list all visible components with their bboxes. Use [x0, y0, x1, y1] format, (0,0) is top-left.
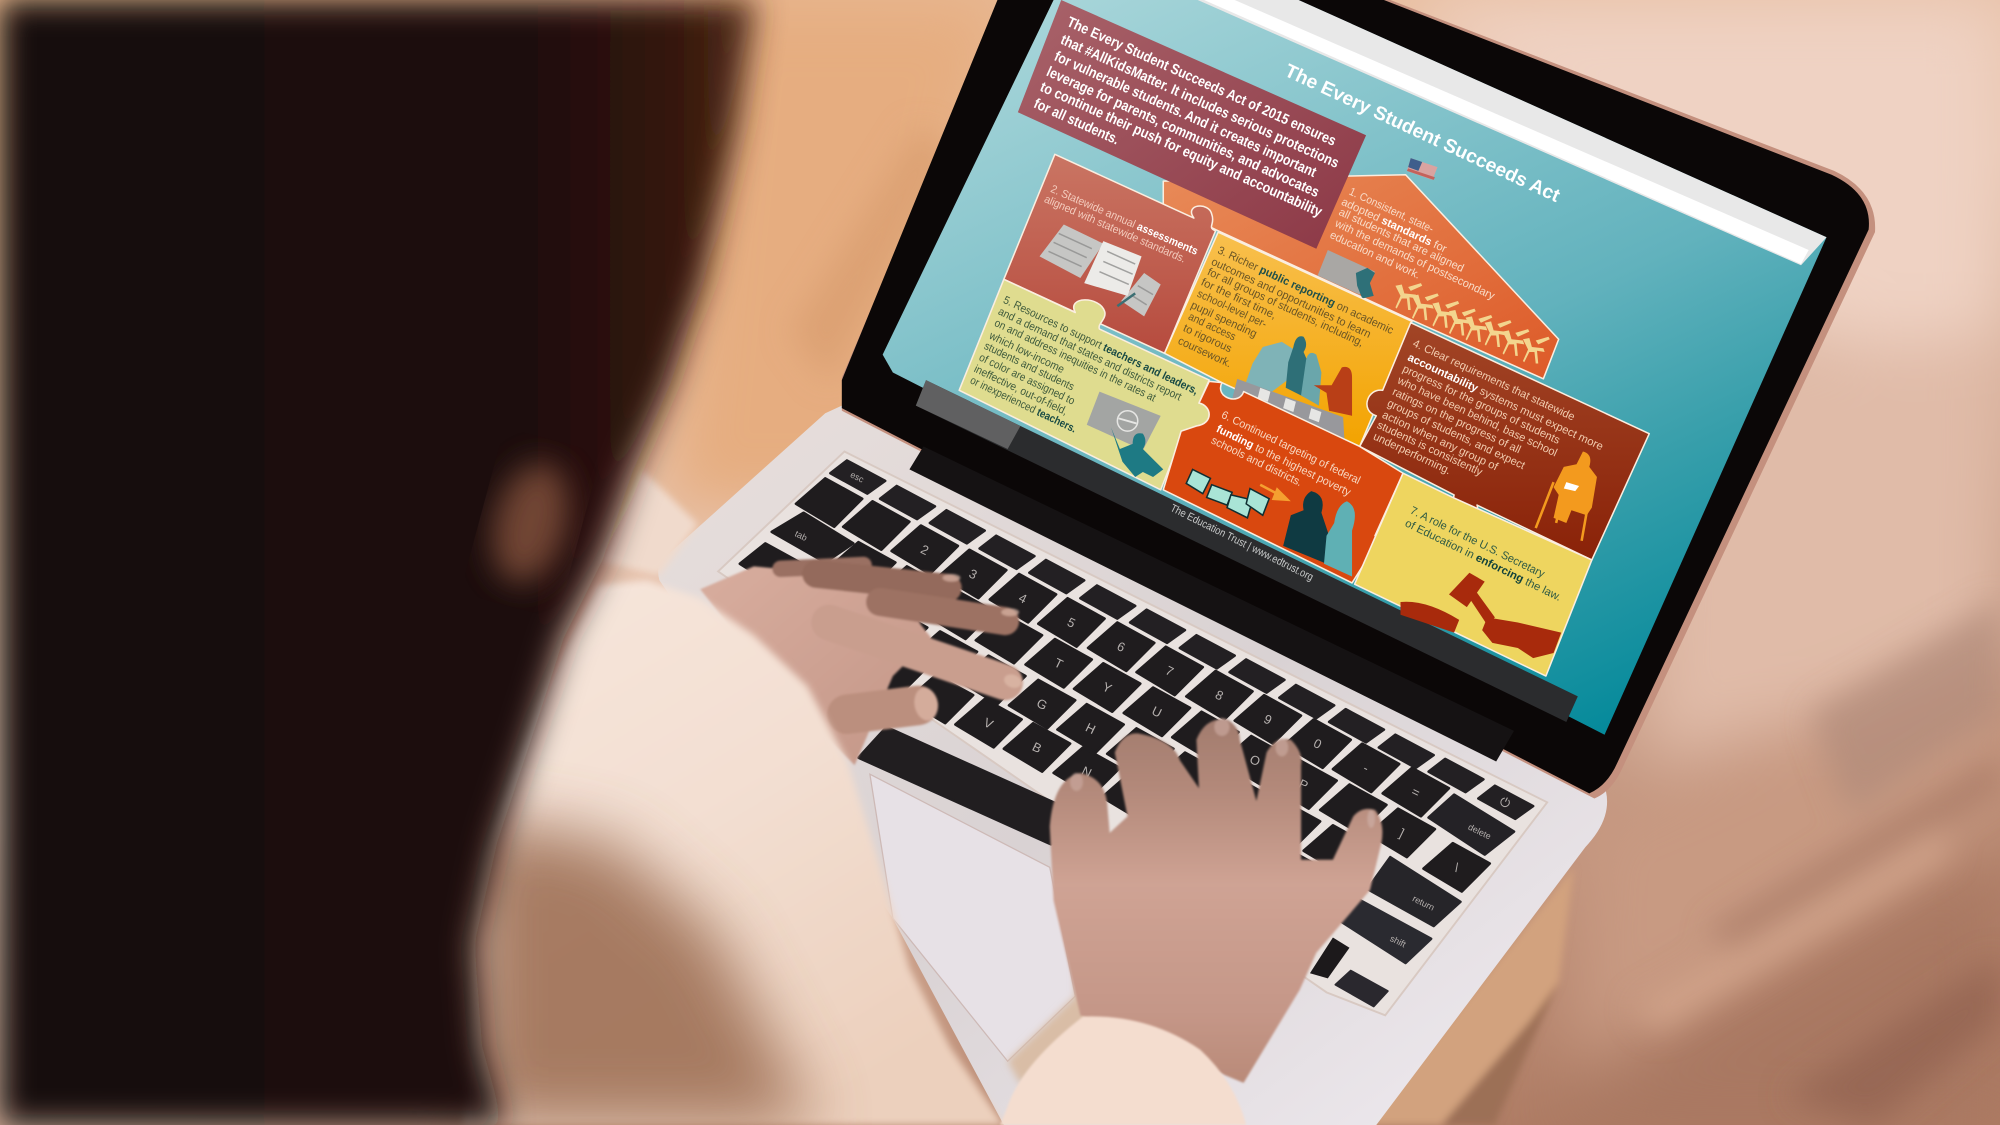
shoulder knit [599, 469, 698, 575]
panel 5 text: of color are assigned to [977, 352, 1077, 408]
panel 5 text: students and students [982, 340, 1076, 394]
icon: two people [1283, 491, 1355, 577]
intro text: for all students. [1031, 96, 1121, 148]
trackpad [870, 774, 1075, 1061]
fingernails [1070, 718, 1375, 828]
key legends: 3 [967, 566, 980, 582]
panel 3 text: coursework. [1176, 335, 1233, 370]
laptop base [658, 406, 1607, 1125]
panel 2: assessments [1004, 154, 1216, 353]
panel 1 text [1328, 186, 1497, 303]
laptop lid and bezel [842, 0, 1875, 798]
panel 3 text: for the first time, [1199, 276, 1278, 322]
key legends: B [1030, 739, 1044, 756]
key legends: U [1149, 703, 1164, 720]
key legends: 6 [1115, 638, 1128, 655]
key legends: tab [793, 529, 809, 543]
key legends: delete [1466, 822, 1493, 841]
key legends: return [1411, 893, 1436, 913]
left hand [700, 565, 1023, 765]
hinge [909, 446, 1514, 761]
panel 2 text: 2. Statewide annual assessments [1049, 183, 1200, 258]
panel 3 text: pupil spending [1189, 299, 1259, 340]
bottom screen strip [916, 380, 1578, 722]
panel 6: funding [1163, 381, 1403, 583]
panel 6 text: schools and districts. [1209, 435, 1304, 489]
panel 4: accountability [1360, 323, 1649, 560]
function key row [830, 460, 1533, 819]
panel 4 text: underperforming. [1371, 431, 1453, 477]
key legends: 2 [918, 541, 931, 558]
panel 5 text: and a demand that states and districts report [996, 306, 1184, 404]
key legends: Y [1100, 679, 1115, 696]
icon: test booklets [1040, 224, 1161, 316]
space bar and arrow keys [858, 727, 1388, 1006]
panel 5: teachers and leaders [959, 279, 1209, 490]
panel 3 text: 3. Richer public reporting on academic [1216, 245, 1396, 337]
panel 5 text: or inexperienced teachers. [968, 375, 1078, 435]
intro box [1018, 0, 1366, 249]
credit line: The Education Trust | www.edtrust.org [1168, 502, 1315, 584]
key legends: = [1409, 784, 1422, 800]
icon: teacher at board [1318, 250, 1375, 298]
key legends: 5 [1065, 614, 1078, 631]
panel 5 text: ineffective, out-of-field, [972, 363, 1069, 418]
panel 3 text: for all groups of students, including, [1205, 266, 1365, 349]
key legends: \ [1452, 860, 1462, 875]
hair [0, 0, 755, 1125]
letter key rows [740, 513, 1490, 963]
key legends: - [1361, 760, 1371, 776]
panel 4 text: groups of students, and expect [1385, 398, 1527, 472]
panel 1 text: adopted standards for [1339, 196, 1449, 256]
panel 1: standards [1163, 175, 1559, 379]
icon: money [1186, 469, 1269, 518]
icon: teacher at whiteboard [1087, 392, 1163, 477]
icon: people at a table [1232, 336, 1352, 439]
panel 3 text: school-level per- [1195, 288, 1269, 331]
infographic title: The Every Student Succeeds Act [1281, 61, 1564, 207]
panel 7 text: of Education in enforcing the law. [1403, 518, 1563, 604]
key legends: 7 [1163, 663, 1176, 679]
panel 3 text: to rigorous [1181, 322, 1234, 356]
panel 3 text: and access [1186, 311, 1238, 343]
key legends: shift [1388, 933, 1408, 950]
panel 1 text: education and work. [1328, 229, 1422, 282]
key legends: 0 [1311, 735, 1324, 752]
panel 5 text: on and address inequities in the rates at [992, 317, 1158, 405]
intro text: to continue their push for equity and accountability [1038, 79, 1325, 221]
arrow [1260, 485, 1291, 501]
laptop screen [883, 0, 1827, 735]
panel 5 text: 5. Resources to support teachers and leaders, [1001, 294, 1200, 397]
key legends: G [1034, 695, 1050, 713]
panel 7 text: 7. A role for the U.S. Secretary [1408, 505, 1547, 581]
key legends: 4 [1016, 590, 1029, 607]
key legends: N [1079, 763, 1094, 780]
fingernails [912, 574, 1023, 722]
panel 3 text [1176, 245, 1396, 370]
key legends: 9 [1261, 711, 1274, 728]
key legends: P [1296, 776, 1311, 793]
keyboard [718, 452, 1547, 1015]
panel 4 text: progress for the groups of students [1401, 363, 1562, 447]
trousers under the laptop [1365, 867, 1574, 1125]
key legends: esc [849, 470, 866, 485]
panel 4 text: who have been behind, base school [1395, 374, 1559, 459]
icon: gavel [1401, 573, 1561, 658]
panel 5 text: which low-income [986, 330, 1066, 376]
panel 4 text [1371, 338, 1605, 479]
icon: flag [1407, 158, 1438, 180]
number key row [796, 478, 1514, 855]
panel 1 text: 1. Consistent, state- [1347, 186, 1435, 236]
intro text: leverage for parents, communities, and advocates [1044, 64, 1321, 201]
intro text: that #AllKidsMatter. It includes serious protections [1058, 32, 1341, 172]
panel 3: public reporting [1165, 232, 1412, 446]
panel 1 text: all students that are aligned [1337, 206, 1466, 275]
panel 4 text: students is consistently [1375, 419, 1484, 479]
key legends: O [1247, 751, 1263, 769]
panel 3 text: outcomes and opportunities to learn [1209, 256, 1373, 341]
panel 6 text: 6. Continued targeting of federal [1219, 409, 1362, 487]
panel 4 text: action when any group of [1380, 409, 1500, 474]
intro text: for vulnerable students. And it creates important [1052, 49, 1319, 181]
key legends [793, 470, 1513, 950]
panel 4 text: ratings on the progress of all [1390, 386, 1523, 456]
sweater shadow [472, 816, 816, 1125]
panel 4 text: 4. Clear requirements that statewide [1411, 338, 1576, 423]
panel 4 text: accountability systems must expect more [1406, 352, 1605, 453]
panel 5 text [968, 294, 1200, 435]
intro text: The Every Student Succeeds Act of 2015 ensures [1064, 14, 1338, 150]
panel 1 text: with the demands of postsecondary [1332, 217, 1497, 303]
key legends: ⏻ [1497, 793, 1513, 811]
key legends: T [1052, 655, 1066, 672]
sweater [463, 469, 1246, 1125]
key legends: 8 [1213, 687, 1226, 703]
icon: students at desks [1395, 283, 1550, 364]
key legends: V [981, 715, 996, 732]
sleeve cuff [1000, 1016, 1246, 1125]
key legends: ] [1397, 825, 1407, 840]
key legends: H [1083, 720, 1098, 737]
panel 2 text: aligned with statewide standards. [1042, 193, 1187, 266]
panel 6 text: funding to the highest poverty [1214, 423, 1353, 499]
browser bar [1198, 0, 1827, 265]
intro text [1031, 14, 1341, 221]
icon: student at desk [1536, 452, 1597, 541]
panel 7: enforcing the law [1355, 473, 1592, 676]
right hand [1050, 718, 1382, 1083]
